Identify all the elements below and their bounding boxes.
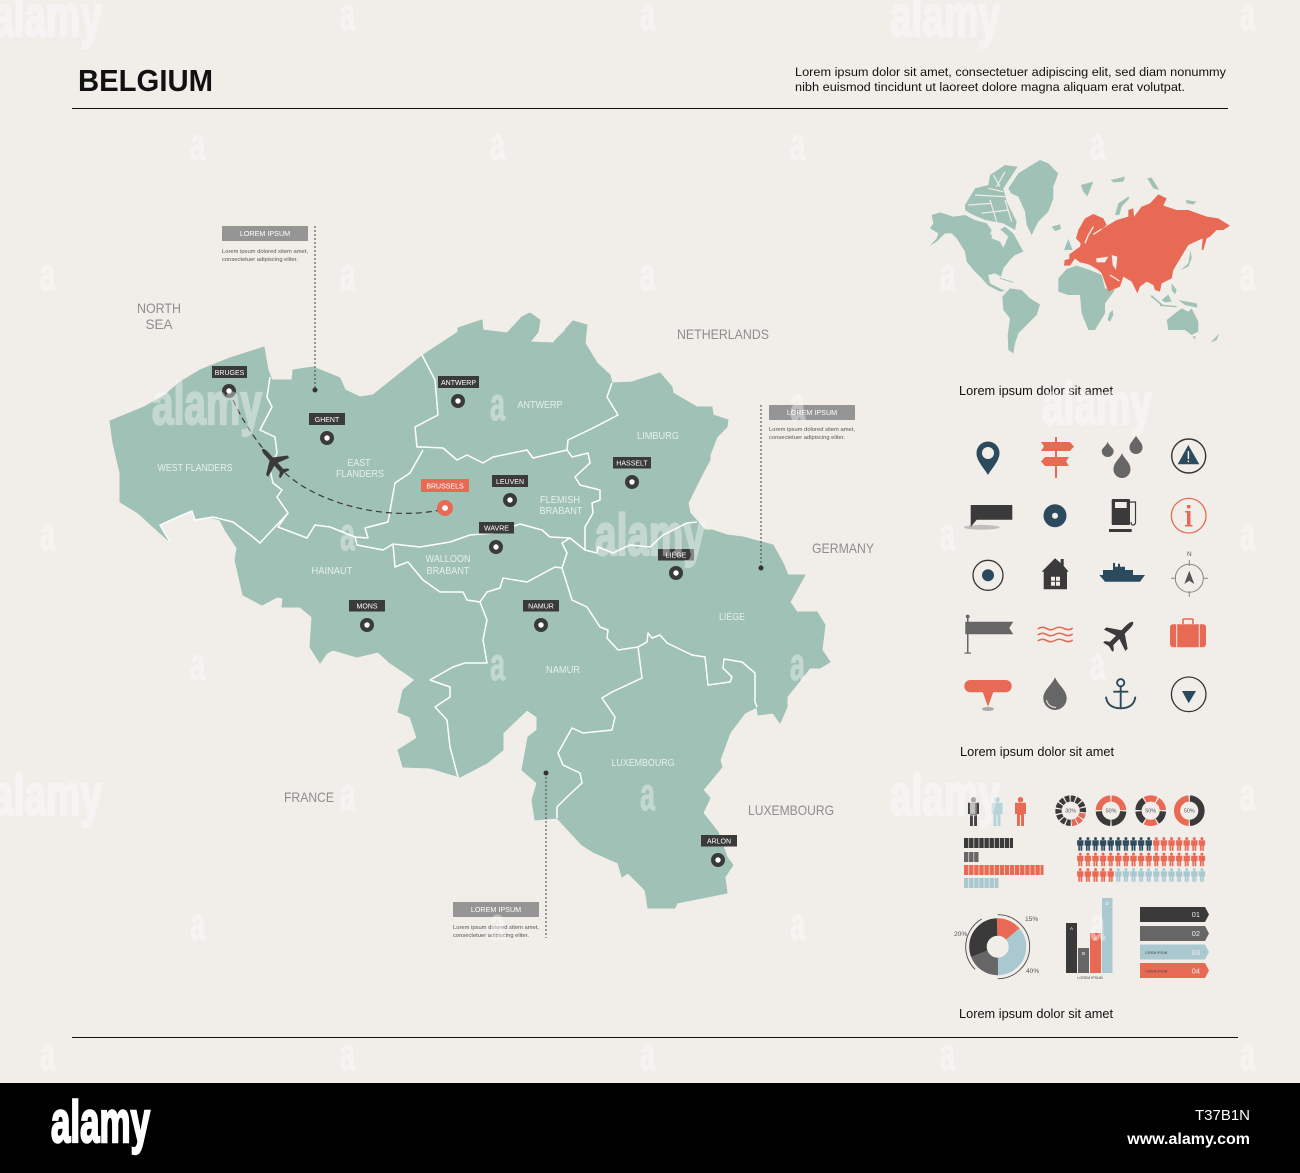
- icon: single drop: [1043, 677, 1067, 710]
- region labels: BRABANT: [540, 506, 582, 517]
- large watermarks: alamy: [1042, 372, 1152, 437]
- watermark tile letters: a: [790, 118, 805, 170]
- city: Brussels capital: BRUSSELS: [426, 484, 464, 490]
- neighbouring country labels: SEA: [146, 316, 173, 332]
- city: Wavre: [479, 522, 514, 554]
- icon: compass: N: [1187, 551, 1192, 558]
- Americas and Greenland: [930, 160, 1061, 353]
- pie chart: 20%: [954, 931, 967, 938]
- pie chart: [954, 915, 1039, 979]
- pie chart: 40%: [1026, 968, 1039, 975]
- footer url: www.alamy.com: [1126, 1131, 1250, 1148]
- city: Namur: NAMUR: [528, 604, 554, 610]
- bar chart: [1066, 898, 1112, 980]
- city: Leuven: LEUVEN: [496, 479, 524, 486]
- callout: north: LOREM IPSUM: [240, 229, 290, 238]
- neighbouring country labels: NETHERLANDS: [677, 326, 769, 342]
- neighbouring country labels: NORTH: [137, 300, 181, 316]
- bar chart: LOREM IPSUM: [1077, 976, 1103, 980]
- intro text: nibh euismod tincidunt ut laoreet dolore magna aliquam erat volutpat.: [795, 80, 1185, 94]
- icon: signpost: [1041, 437, 1074, 478]
- icon: location pin: [976, 442, 1000, 475]
- city: Antwerp: [438, 376, 479, 408]
- watermark tile letters: a: [40, 248, 55, 300]
- region labels: FLEMISH: [540, 495, 580, 506]
- watermark tile letters: a: [640, 248, 655, 300]
- watermark tile letters: a: [490, 118, 505, 170]
- watermark tile letters: a: [940, 508, 955, 560]
- watermark tile letters: a: [790, 898, 805, 950]
- icon: three drops: [1102, 435, 1142, 478]
- city: Liege: LIÉGE: [666, 550, 687, 560]
- watermark tile letters: a: [1240, 508, 1255, 560]
- watermark tile letters: a: [1090, 118, 1105, 170]
- callout: south: [453, 770, 548, 939]
- callout: south: LOREM IPSUM: [471, 905, 521, 914]
- watermark tile letters: a: [340, 768, 355, 820]
- region labels: WEST FLANDERS: [158, 463, 233, 474]
- caption: world map: Lorem ipsum dolor sit amet: [959, 384, 1113, 398]
- callout: east: [758, 405, 855, 570]
- Scheldt island hole: [553, 324, 565, 337]
- callout: south: Lorem ipsum dolored sitem amet,: [453, 925, 539, 931]
- region labels: FLANDERS: [336, 469, 384, 480]
- numbered arrow list: 03: [1192, 948, 1200, 957]
- city: Mons: [349, 600, 385, 632]
- icon set: [964, 435, 1208, 712]
- watermark tile letters: a: [1090, 638, 1105, 690]
- numbered arrow list: LOREM IPSUM: [1145, 951, 1168, 955]
- city: Mons: MONS: [356, 604, 378, 610]
- region labels: WALLOON: [426, 554, 470, 565]
- watermark tile letters: a: [640, 768, 655, 820]
- large watermarks: [0, 0, 1152, 828]
- icon: suitcase: [1170, 619, 1206, 647]
- donut 4: 50%: [1184, 809, 1195, 815]
- watermark tile letters: a: [490, 898, 505, 950]
- region labels: NAMUR: [546, 665, 580, 676]
- donut charts: [1058, 794, 1202, 827]
- callout: east: consectetuer adipiscing eliter.: [769, 435, 845, 441]
- region labels: LIMBURG: [637, 431, 679, 442]
- city: Namur: [523, 600, 559, 632]
- neighbouring country labels: FRANCE: [284, 789, 334, 805]
- neighbouring country labels: LUXEMBOURG: [748, 802, 834, 818]
- watermark tile letters: a: [40, 508, 55, 560]
- watermark tile letters: a: [640, 1028, 655, 1080]
- watermark tile letters: a: [490, 378, 505, 430]
- watermark tile letters: a: [940, 248, 955, 300]
- title: BELGIUM: [78, 63, 213, 98]
- watermark tile letters: a: [1090, 898, 1105, 950]
- icon: ship: [1099, 563, 1145, 582]
- people figures: [968, 797, 1026, 826]
- watermark tile letters: a: [790, 378, 805, 430]
- icon: house: [1042, 558, 1069, 589]
- region labels: BRABANT: [426, 566, 470, 577]
- icon: target: [973, 560, 1003, 590]
- watermark tile letters: a: [1240, 248, 1255, 300]
- icon: info: [1171, 498, 1206, 533]
- watermark tile letters: a: [40, 1028, 55, 1080]
- watermark tile letters: a: [190, 638, 205, 690]
- numbered arrow list: 01: [1192, 910, 1200, 919]
- donut 4: [1177, 798, 1202, 823]
- large watermarks: alamy: [152, 372, 262, 437]
- footer logo: alamy: [51, 1090, 150, 1155]
- numbered arrow list: 02: [1192, 929, 1200, 938]
- icon: flag: [964, 615, 1013, 654]
- city: Hasselt: HASSELT: [616, 460, 648, 468]
- region labels: [158, 400, 745, 769]
- watermark tile letters: a: [340, 248, 355, 300]
- region labels: LUXEMBOURG: [612, 758, 675, 769]
- icon: plane: [1097, 611, 1144, 658]
- large watermarks: alamy: [595, 503, 705, 568]
- footer bar: [0, 1083, 1300, 1173]
- region labels: LIÉGE: [719, 610, 745, 623]
- callout: north: [222, 226, 318, 392]
- donut 1: 30%: [1065, 809, 1076, 815]
- footer image id: T37B1N: [1195, 1107, 1250, 1124]
- watermark tile letters: a: [940, 1028, 955, 1080]
- watermark tile letters: a: [190, 898, 205, 950]
- bar chart: B: [1082, 951, 1085, 956]
- city: Antwerp: ANTWERP: [441, 380, 476, 387]
- city: Ghent: [309, 413, 345, 445]
- map of Belgium: [110, 313, 830, 908]
- flight route: [229, 391, 445, 513]
- region labels: HAINAUT: [312, 566, 352, 577]
- figure: red: [1015, 797, 1026, 826]
- figure: light blue: [992, 797, 1002, 826]
- city: Arlon: ARLON: [707, 838, 731, 846]
- city markers: [212, 366, 737, 867]
- region labels: ANTWERP: [518, 400, 563, 411]
- icon: compass: [1171, 551, 1208, 597]
- provincial borders: [160, 355, 757, 818]
- icon: speech flag: [964, 505, 1012, 530]
- bar chart: A: [1070, 926, 1074, 931]
- city: Bruges: BRUGES: [215, 370, 245, 377]
- segmented bars: [964, 843, 1044, 883]
- icon: disc: [1044, 504, 1066, 527]
- icon: waves: [1038, 627, 1073, 642]
- callout: south: consectetuer adipiscing eliter.: [453, 933, 529, 939]
- callout: north: consectetuer adipiscing eliter.: [222, 257, 298, 263]
- icon: down button: [1171, 677, 1206, 712]
- callout: east: Lorem ipsum dolored sitem amet,: [769, 427, 855, 433]
- region labels: EAST: [348, 458, 370, 469]
- city: Arlon: [701, 835, 737, 867]
- numbered arrow list: 04: [1192, 966, 1200, 976]
- numbered arrow list: LOREM IPSUM: [1145, 970, 1168, 974]
- intro text: Lorem ipsum dolor sit amet, consectetuer adipiscing elit, sed diam nonummy: [795, 65, 1227, 79]
- pie chart: 15%: [1025, 916, 1038, 923]
- icon: anchor: [1106, 679, 1135, 708]
- city: Liege: [658, 549, 694, 580]
- large watermarks: alamy: [890, 763, 1000, 828]
- watermark tile letters: a: [190, 118, 205, 170]
- donut 2: [1099, 798, 1123, 823]
- numbered arrow list: [1140, 907, 1209, 978]
- watermark tile letters: a: [1240, 768, 1255, 820]
- caption: charts: Lorem ipsum dolor sit amet: [959, 1007, 1113, 1021]
- watermark tile letters: a: [1240, 1028, 1255, 1080]
- bar chart: D: [1105, 901, 1109, 906]
- people pictogram grid: [1076, 837, 1206, 883]
- figure: dark and grey: [968, 797, 979, 826]
- intro text: [795, 65, 1227, 94]
- icon: warning: [1172, 439, 1206, 473]
- watermark tile letters: a: [490, 638, 505, 690]
- Eastern hemisphere: [1058, 177, 1230, 343]
- callout: east: LOREM IPSUM: [787, 408, 837, 417]
- donut 3: [1134, 794, 1167, 827]
- icon: plane on map: [252, 440, 296, 484]
- callout: north: Lorem ipsum dolored sitem amet,: [222, 249, 308, 255]
- city: Hasselt: [613, 457, 651, 489]
- watermark tile letters: a: [340, 508, 355, 560]
- world map: [930, 160, 1230, 353]
- country silhouette: [110, 313, 830, 908]
- icon: map pointer: [964, 680, 1012, 711]
- watermark tile letters: a: [340, 1028, 355, 1080]
- city: Wavre: WAVRE: [484, 526, 509, 532]
- watermark tile letters: a: [790, 638, 805, 690]
- city: Bruges: [212, 366, 247, 398]
- city: Leuven: [492, 475, 528, 507]
- neighbouring country labels: GERMANY: [812, 540, 875, 556]
- city: Ghent: GHENT: [315, 417, 340, 424]
- donut 3: 50%: [1145, 809, 1156, 815]
- city: Brussels capital: [421, 479, 469, 516]
- icon: fuel pump: [1109, 499, 1136, 532]
- bar chart: C: [1094, 936, 1098, 941]
- donut 2: 50%: [1106, 809, 1117, 815]
- donut 1: [1058, 798, 1083, 823]
- neighbouring country labels: [137, 300, 875, 818]
- caption: icons: Lorem ipsum dolor sit amet: [960, 745, 1114, 759]
